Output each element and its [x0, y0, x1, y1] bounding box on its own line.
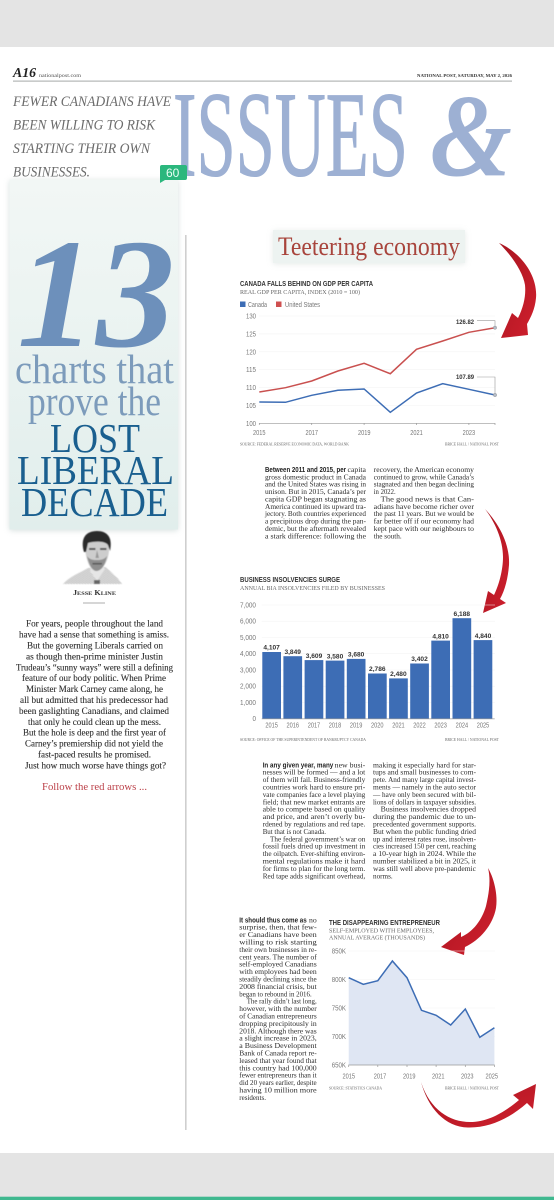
source line: SOURCE: OFFICE OF THE SUPERINTENDENT OF BANKRUPTCY CANADA	[240, 738, 366, 742]
page header	[12, 65, 513, 82]
headline: charts that prove the: charts that	[15, 346, 175, 392]
text block: entrepreneur commentary: with employees had been	[239, 967, 317, 976]
bottom grey band	[0, 1153, 554, 1197]
text block: entrepreneur commentary: residents.	[239, 1093, 266, 1102]
x axis: 2023	[461, 1073, 474, 1080]
text block: GDP commentary: jectory. Both countries experienced	[264, 509, 366, 518]
icon: author portrait	[63, 531, 122, 584]
y axis labels: 110	[246, 385, 256, 392]
text block: introduction: all but admitted that his predecessor had	[20, 695, 168, 706]
page header: A16	[12, 65, 36, 80]
top grey band	[0, 0, 554, 47]
y axis labels: 6,000	[240, 618, 256, 626]
chart heading: SELF-EMPLOYED WITH EMPLOYEES,	[329, 929, 434, 935]
text block: GDP commentary: the south.	[374, 531, 402, 540]
chart heading: REAL GDP PER CAPITA, INDEX (2010 = 100)	[240, 289, 360, 296]
text block: GDP commentary: kept pace with our neighbours to	[374, 524, 474, 533]
deck text: FEWER CANADIANS HAVE	[12, 94, 171, 110]
x axis: 2019	[403, 1073, 416, 1080]
y axis labels: 850K	[332, 948, 346, 955]
callout: 126.82: 126.82	[456, 319, 474, 326]
text block: GDP commentary: capita	[348, 465, 367, 474]
text block: entrepreneur commentary: surprise, then, that few-	[239, 923, 317, 932]
gridlines	[259, 316, 495, 406]
byline	[73, 589, 116, 603]
bar value labels: 3,402	[411, 656, 428, 663]
y axis labels: 650K	[332, 1062, 346, 1069]
text block: entrepreneur commentary: The rally didn’t last long,	[247, 997, 317, 1006]
x axis: 2015	[342, 1073, 355, 1080]
x axis: 2021	[432, 1073, 445, 1080]
text block: entrepreneur commentary: however, with the number	[239, 1004, 317, 1013]
deck text: BUSINESSES.	[13, 164, 90, 180]
text block: introduction: But the governing Liberals carried on	[27, 640, 163, 652]
text block: entrepreneur commentary: It should thus come as	[239, 917, 307, 924]
callout: 107.89: 107.89	[456, 374, 474, 381]
bar value labels: 2,786	[369, 666, 386, 673]
text block: GDP commentary	[264, 465, 475, 540]
text block: entrepreneur commentary: steadily declining since the	[239, 974, 317, 984]
text block: insolvencies commentary: was still well above pre-pandemic	[373, 864, 477, 873]
text block: entrepreneur commentary: willing to risk starting	[239, 938, 317, 946]
text block: introduction	[16, 619, 173, 771]
callout: 126.82	[456, 319, 497, 329]
bar value labels: 3,849	[284, 649, 301, 656]
x axis: 2025	[477, 722, 489, 730]
bar value labels: 3,609	[306, 653, 323, 660]
notification badge	[160, 165, 187, 183]
y axis labels: 5,000	[240, 635, 256, 642]
text block: insolvencies commentary: The federal government’s war on	[270, 834, 366, 843]
source line: SOURCE: STATISTICS CANADA	[329, 1086, 382, 1090]
text block: insolvencies commentary: number stabilized a bit in 2025, it	[373, 856, 477, 866]
x axis: 2023	[463, 430, 475, 437]
text block: insolvencies commentary: rdened by regulations and red tape.	[263, 820, 365, 828]
text block: GDP commentary: and the United States was rising in	[265, 480, 366, 489]
text block: entrepreneur commentary: a slight increase in 2023,	[239, 1034, 317, 1043]
text block: insolvencies commentary: tups and small businesses to com-	[373, 768, 476, 777]
x axis: 2018	[329, 722, 341, 730]
source line	[240, 738, 500, 742]
text block: insolvencies commentary: But when the public funding dried	[373, 827, 476, 836]
y axis labels: 120	[246, 349, 256, 356]
text block: GDP commentary: far better off if our economy had	[374, 517, 474, 526]
text block: insolvencies commentary: a 10-year high in 2024. While the	[373, 849, 477, 858]
text block: entrepreneur commentary: having 10 million more	[239, 1086, 317, 1094]
arrow: red arrow to GDP chart	[499, 243, 536, 338]
deck text	[12, 94, 171, 180]
x axis: 2025	[486, 1073, 498, 1080]
x axis: 2017	[306, 430, 318, 437]
headline: lost liberal decade: LIBERAL	[17, 447, 174, 493]
bars	[262, 618, 492, 719]
arrow: red arrow toward next page	[421, 1082, 536, 1128]
x axis: 2021	[410, 430, 423, 437]
text block: introduction: For years, people throughout the land	[26, 619, 163, 630]
x axis: 2023	[434, 722, 447, 730]
section title: Issues &: &	[430, 70, 512, 201]
page header: NATIONAL POST, SATURDAY, MAY 2, 2026	[417, 73, 513, 78]
text block: insolvencies commentary: able to compete based on quality	[263, 805, 366, 814]
x axis: 2016	[286, 722, 299, 730]
source line: BRICE HALL / NATIONAL POST	[445, 738, 500, 742]
y axis labels: 7,000	[240, 602, 256, 609]
text block: GDP commentary: adians have become richer over	[374, 502, 475, 511]
text block: entrepreneur commentary: of Canadian entrepreneurs	[239, 1012, 317, 1020]
text block: insolvencies commentary: But that is not Canada.	[263, 827, 326, 836]
text block: insolvencies commentary: cies increased 150 per cent, reaching	[373, 842, 476, 851]
text block: entrepreneur commentary: Bank of Canada report re-	[239, 1048, 317, 1058]
source line	[240, 443, 500, 448]
text block: insolvencies commentary: mental regulations make it hard	[263, 856, 366, 866]
y axis labels: 4,000	[240, 651, 256, 658]
gridlines	[262, 605, 495, 702]
text block: GDP commentary: a stark difference: following the	[265, 531, 367, 540]
bar value labels: 4,107	[263, 644, 280, 652]
text block: entrepreneur commentary: 2008 financial crisis, but	[239, 982, 318, 991]
headline: lost liberal decade: DECADE	[21, 479, 168, 525]
text block: insolvencies commentary: In any given year, many	[263, 762, 333, 769]
text block: insolvencies commentary: during the pandemic due to un-	[373, 812, 477, 821]
chart: disappearing entrepreneur	[329, 918, 500, 1090]
chart: business insolvencies	[240, 575, 500, 742]
text block: introduction: Trudeau’s “sunny ways” were still a defining	[16, 662, 173, 673]
chart heading: CANADA FALLS BEHIND ON GDP PER CAPITA	[240, 279, 374, 288]
chart heading: BUSINESS INSOLVENCIES SURGE	[240, 575, 340, 584]
bar value labels	[263, 611, 492, 678]
text block: introduction: as though then-prime minister Justin	[26, 651, 163, 662]
text block: insolvencies commentary: Business insolvencies dropped	[381, 805, 476, 814]
x axis	[253, 423, 495, 437]
text block: entrepreneur commentary: dropping precipitously in	[239, 1019, 317, 1028]
text block: GDP commentary: capita GDP began stagnating as	[265, 494, 366, 504]
x axis: 2015	[253, 430, 266, 437]
text block: insolvencies commentary: new busi-	[335, 760, 366, 769]
notification badge: 60	[166, 166, 180, 180]
y axis labels: 800K	[332, 977, 346, 984]
text block: GDP commentary: stagnated and then began declining	[374, 480, 474, 489]
text block: entrepreneur commentary: self-employed Canadians	[239, 960, 317, 969]
bar value labels: 3,680	[348, 652, 365, 658]
text block: introduction: Minister Mark Carney came along, he	[26, 684, 163, 695]
text block: GDP commentary: continued to grow, while Canada’s	[374, 472, 474, 481]
text block: insolvencies commentary: norms.	[373, 871, 393, 880]
headline: charts that prove the	[15, 346, 175, 424]
y axis labels: 0	[252, 716, 256, 723]
text block: insolvencies commentary: making it especially hard for star-	[373, 760, 477, 769]
x axis	[342, 1065, 498, 1080]
text block: introduction: Carney’s premiership did not yield the	[25, 739, 163, 750]
area fill	[349, 961, 494, 1065]
page header: nationalpost.com	[39, 73, 82, 79]
text block: entrepreneur commentary: leased that year found that	[239, 1056, 318, 1065]
text block: insolvencies commentary: field; that new market entrants are	[263, 797, 366, 806]
text block: GDP commentary: gross domestic product in Canada	[265, 472, 367, 481]
text block: GDP commentary: America continued its upward tra-	[265, 502, 366, 511]
text block: introduction: fast-paced results he promised.	[38, 750, 151, 760]
chart heading: ANNUAL AVERAGE (THOUSANDS)	[329, 935, 425, 942]
y axis labels	[332, 948, 346, 1069]
x axis: 2020	[371, 722, 384, 730]
text block: GDP commentary: the past 11 years. But we would be	[374, 509, 475, 518]
y axis labels: 700K	[332, 1034, 346, 1041]
text block: insolvencies commentary: the oilpatch. Ever-shifting environ-	[263, 849, 366, 858]
chart heading	[240, 279, 374, 296]
byline: JESSE KLINE	[73, 589, 116, 597]
chart heading: ANNUAL BIA INSOLVENCIES FILED BY BUSINESSES	[240, 586, 385, 592]
text block: insolvencies commentary: countries work hard to ensure pri-	[263, 782, 366, 792]
big number 13: 13	[17, 207, 175, 380]
legend: Canada	[248, 302, 267, 309]
text block: insolvencies commentary: fossil fuels dried up investment in	[263, 842, 366, 851]
x axis: 2024	[456, 722, 468, 730]
text block: insolvencies commentary: — have only been secured with bil-	[372, 790, 476, 799]
text block: introduction: Just how much worse have things got?	[25, 760, 166, 771]
arrow: red arrow to insolvencies chart	[483, 509, 509, 613]
source line: BRICE HALL / NATIONAL POST	[445, 443, 500, 447]
legend	[240, 302, 320, 309]
text block: entrepreneur commentary: fewer entrepreneurs than it	[239, 1071, 318, 1080]
callout: follow the red arrows: Follow the red arrows ...	[42, 781, 147, 793]
y axis labels: 100	[246, 421, 256, 428]
text block: entrepreneur commentary: their own businesses in re-	[239, 945, 317, 954]
text block: entrepreneur commentary: did 20 years earlier, despite	[239, 1078, 317, 1087]
text block: GDP commentary: a precipitous drop during the pan-	[265, 517, 366, 526]
chart heading	[329, 918, 441, 942]
gridlines	[348, 951, 495, 1036]
text block: insolvencies commentary: nesses will be formed — and a lot	[263, 768, 366, 777]
bar value labels: 3,580	[327, 653, 344, 660]
text block: entrepreneur commentary: this country had 100,000	[239, 1063, 317, 1072]
callout: 107.89	[456, 374, 497, 397]
y axis labels: 130	[246, 314, 256, 320]
y axis labels: 3,000	[240, 667, 256, 674]
deck text: STARTING THEIR OWN	[13, 141, 151, 157]
y axis labels: 1,000	[240, 700, 256, 707]
section heading: Teetering economy: Teetering economy	[278, 232, 460, 261]
bar value labels: 2,480	[390, 671, 407, 678]
source line: BRICE HALL / NATIONAL POST	[445, 1086, 500, 1090]
text block: entrepreneur commentary: 2018. Although there was	[239, 1026, 317, 1035]
chart heading	[240, 575, 385, 592]
bar value labels: 4,810	[432, 634, 449, 640]
text block: introduction: been gaslighting Canadians, and claimed	[19, 706, 169, 717]
arrow: red arrow to entrepreneur chart	[441, 868, 497, 955]
text block: introduction: But the hole is deep and the first year of	[23, 728, 167, 739]
text block: GDP commentary: demic, but the aftermath revealed	[265, 524, 366, 533]
source line	[329, 1086, 500, 1090]
text block: GDP commentary: unison. But in 2015, Canada’s per	[265, 487, 366, 496]
text block: insolvencies commentary: ments — namely in the auto sector	[373, 782, 476, 792]
text block: insolvencies commentary: Red tape adds significant overhead,	[263, 871, 365, 880]
text block: introduction: have had a sense that something is amiss.	[19, 630, 169, 641]
x axis: 2022	[413, 722, 426, 730]
text block: insolvencies commentary: of them will fail. Business-friendly	[263, 775, 366, 784]
text block: entrepreneur commentary: a Business Development	[239, 1041, 318, 1050]
y axis labels: 750K	[332, 1005, 346, 1012]
deck text: BEEN WILLING TO RISK	[13, 118, 156, 134]
text block: entrepreneur commentary: began to rebound in 2016.	[239, 989, 312, 998]
source line: SOURCE: FEDERAL RESERVE ECONOMIC DATA, WORLD BANK	[240, 443, 349, 448]
text block: insolvencies commentary	[263, 760, 477, 880]
text block: insolvencies commentary: precedented government supports.	[373, 820, 476, 828]
x axis: 2015	[265, 722, 278, 730]
bar value labels: 6,188	[454, 611, 470, 618]
text block: insolvencies commentary: and price, and aren’t overly bu-	[263, 812, 366, 821]
panel: headline	[10, 180, 178, 530]
chart: GDP per capita	[240, 279, 500, 448]
x axis: 2017	[308, 722, 320, 730]
y axis labels: 105	[246, 403, 256, 410]
bar value labels: 4,840	[475, 633, 492, 640]
text block: GDP commentary: recovery, the American economy	[374, 465, 474, 474]
text block: entrepreneur commentary: cent years. The number of	[239, 952, 317, 961]
text block: insolvencies commentary: lions of dollars in taxpayer subsidies.	[373, 797, 476, 806]
column divider	[185, 235, 187, 1130]
text block: GDP commentary: Between 2011 and 2015, per	[265, 467, 346, 474]
y axis labels	[240, 602, 256, 723]
text block: entrepreneur commentary	[239, 915, 318, 1102]
line: Canada	[259, 384, 495, 412]
text block: insolvencies commentary: pete. And many large capital invest-	[373, 775, 476, 784]
headline: lost liberal decade	[17, 415, 174, 525]
text block: GDP commentary: The good news is that Can-	[381, 494, 475, 504]
text block: introduction: that only he could clean up the mess.	[28, 717, 161, 728]
text block: entrepreneur commentary: no	[309, 915, 317, 924]
text block: insolvencies commentary: up and interest rates rose, insolven-	[373, 834, 476, 843]
y axis labels: 2,000	[240, 684, 256, 690]
headline: charts that prove the: prove the	[28, 378, 161, 424]
text block: entrepreneur commentary: er Canadians have been	[239, 930, 317, 939]
legend: United States	[285, 302, 320, 309]
headline: lost liberal decade: LOST	[50, 415, 140, 461]
x axis: 2021	[392, 722, 405, 730]
x axis: 2019	[358, 430, 371, 437]
text block: GDP commentary: in 2022.	[374, 487, 396, 496]
x axis	[262, 718, 495, 730]
x axis: 2017	[374, 1073, 386, 1080]
text block: insolvencies commentary: for firms to plan for the long term.	[263, 864, 365, 873]
text block: insolvencies commentary: vate companies face a level playing	[263, 790, 366, 799]
line: United States	[259, 328, 495, 392]
chart heading: THE DISAPPEARING ENTREPRENEUR	[329, 918, 441, 927]
y axis labels	[246, 314, 256, 428]
x axis: 2019	[350, 722, 362, 730]
line: self-employed	[349, 961, 494, 1037]
text block: introduction: feature of our body politic. When Prime	[22, 673, 166, 684]
bottom green strip	[0, 1197, 554, 1200]
y axis labels: 115	[246, 367, 256, 374]
y axis labels: 125	[246, 331, 256, 338]
